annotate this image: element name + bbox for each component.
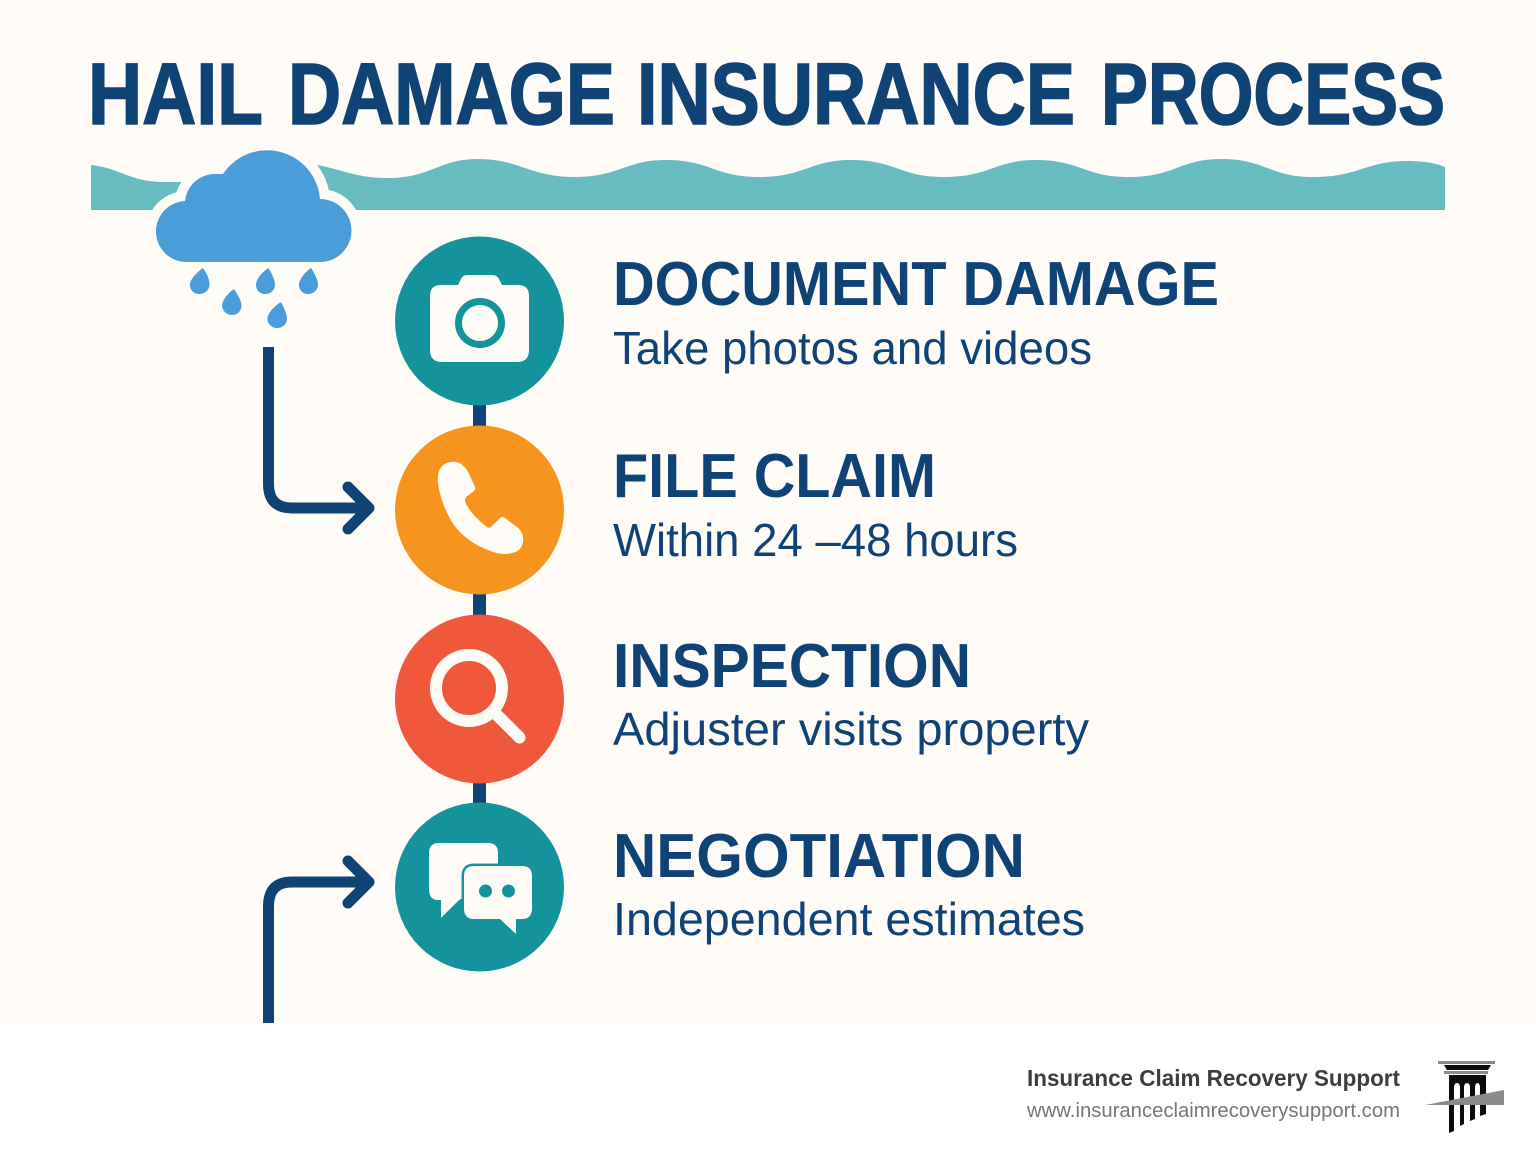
step 4: negotiation [395, 802, 1085, 972]
description: within 24-48 hours: Within 24 –48 hours [613, 514, 1018, 566]
icon: chat bubbles [395, 802, 564, 972]
icon: column logo [1425, 1061, 1504, 1133]
title [88, 46, 1445, 143]
heading: negotiation: NEGOTIATION [613, 822, 1025, 891]
arrow: up to negotiation [268, 861, 369, 1023]
description: adjuster visits: Adjuster visits property [613, 703, 1089, 755]
heading: inspection: INSPECTION [613, 632, 971, 701]
icon: phone [395, 426, 564, 594]
step 3: inspection [395, 614, 1089, 784]
step 2: file claim [395, 426, 1018, 594]
description: take photos: Take photos and videos [613, 322, 1092, 374]
title: PROCESS [1101, 46, 1445, 143]
step 1: document damage [395, 236, 1219, 406]
footer url: www.insuranceclaimrecoverysupport.com [1026, 1100, 1400, 1122]
title: DAMAGE [288, 46, 615, 143]
heading: file claim: FILE CLAIM [613, 442, 936, 511]
wave banner [91, 159, 1445, 210]
icon: rain cloud [156, 150, 352, 328]
description: independent estimates: Independent estimates [613, 893, 1085, 945]
heading: document damage: DOCUMENT DAMAGE [613, 250, 1219, 319]
icon: camera [395, 236, 564, 406]
connector line [473, 400, 486, 810]
arrow: cloud to file claim [268, 347, 369, 529]
icon: magnifying glass [395, 614, 564, 784]
title: HAIL [88, 46, 263, 143]
footer brand name: Insurance Claim Recovery Support [1027, 1065, 1400, 1091]
title: INSURANCE [637, 46, 1075, 143]
